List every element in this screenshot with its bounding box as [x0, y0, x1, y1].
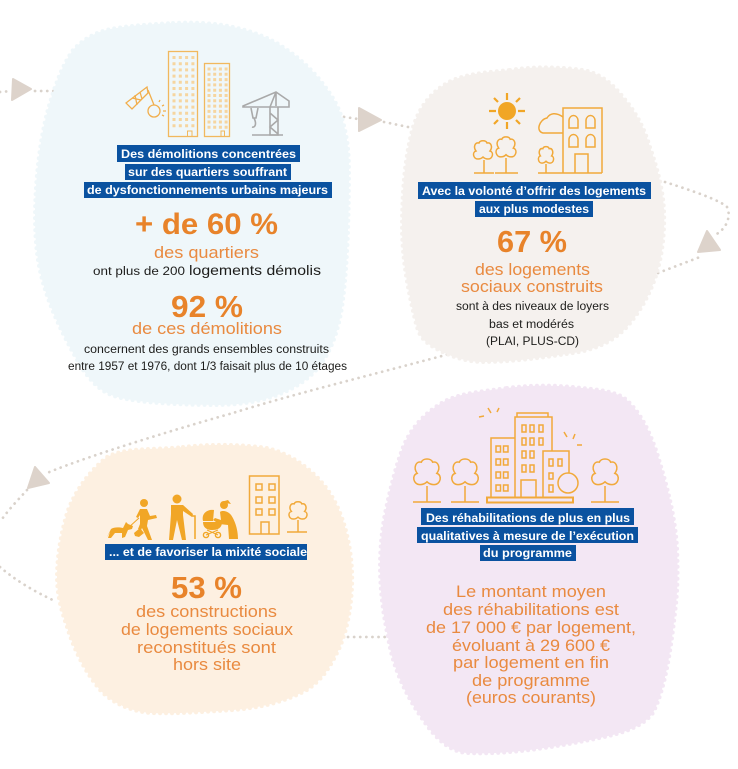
stat: 53 percent: reconstitués sont: [137, 639, 276, 657]
arrow: to social mix: [28, 467, 49, 488]
text: average amount: Le montant moyen: [456, 583, 606, 601]
stat: more than 60 percent: logements démolis: [189, 262, 321, 278]
stat: 53 percent: hors site: [173, 656, 241, 674]
panel: demolitions background: [35, 23, 349, 405]
text: average amount: (euros courants): [466, 689, 596, 707]
icon: sun: [489, 93, 525, 129]
heading: demolitions: de dysfonctionnements urbains majeurs: [87, 185, 328, 197]
heading: rehabilitation: du programme: [483, 548, 572, 560]
stat: 67 percent: sont à des niveaux de loyers: [456, 301, 609, 313]
panel: new housing background: [402, 67, 664, 362]
heading: rehabilitation: Des réhabilitations de plus en plus: [426, 513, 630, 525]
stat: 67 percent: sociaux construits: [461, 277, 603, 296]
icon: elder with cane: [169, 494, 195, 540]
icon: second tower: [204, 64, 230, 136]
heading: new housing: [418, 182, 651, 217]
stat: 92 percent: de ces démolitions: [132, 319, 282, 338]
icon: rehabilitation trees: [413, 459, 619, 502]
text: average amount: de 17 000 € par logement,: [426, 619, 636, 637]
stat: more than 60 percent: [93, 208, 321, 278]
panel: social mix background: [57, 445, 352, 713]
icon: dog walker: [107, 499, 157, 540]
heading: social mix: [105, 544, 307, 560]
stat: more than 60 percent: ont plus de 200: [93, 266, 185, 278]
icon: rehabilitated buildings: [479, 408, 582, 502]
heading: new housing: Avec la volonté d’offrir des logements: [422, 186, 646, 198]
icon: parent with pram: [203, 500, 238, 539]
text: average amount: évoluant à 29 600 €: [452, 637, 610, 655]
dotted journey line: [0, 91, 729, 637]
panel: rehabilitation background: [380, 386, 678, 753]
stat: 67 percent: [456, 224, 609, 348]
heading: rehabilitation: qualitatives à mesure de l’exécution: [421, 531, 634, 543]
stat: 67 percent: (PLAI, PLUS-CD): [486, 336, 579, 348]
stat: more than 60 percent: des quartiers: [154, 243, 259, 262]
stat: 67 percent: des logements: [475, 260, 590, 279]
stat: 92 percent: 92 %: [171, 289, 243, 324]
stat: 92 percent: entre 1957 et 1976, dont 1/3 faisait plus de 10 étages: [68, 361, 347, 373]
text: average amount: des réhabilitations est: [443, 601, 619, 619]
text: average amount: par logement en fin: [453, 654, 609, 672]
heading: demolitions: [84, 145, 332, 198]
heading: rehabilitation: [417, 508, 638, 561]
heading: demolitions: sur des quartiers souffrant: [128, 167, 287, 179]
icon: building: [250, 476, 279, 534]
arrow: to housing: [359, 108, 381, 131]
arrow: entry: [12, 79, 31, 100]
stat: 53 percent: [121, 570, 294, 674]
heading: demolitions: Des démolitions concentrées: [121, 149, 296, 161]
heading: new housing: aux plus modestes: [479, 204, 589, 216]
icon: people group: [107, 476, 307, 540]
heading: social mix: ... et de favoriser la mixité sociale: [109, 547, 307, 559]
stat: 53 percent: des constructions: [136, 603, 277, 621]
stat: 67 percent: bas et modérés: [489, 319, 574, 331]
stat: more than 60 percent: + de 60 %: [135, 208, 278, 241]
text: average amount: de programme: [472, 672, 590, 690]
text: average amount: [426, 583, 636, 707]
stat: 53 percent: 53 %: [171, 570, 242, 605]
stat: 92 percent: concernent des grands ensembles construits: [84, 344, 329, 356]
arrow: to next row: [698, 231, 720, 252]
icon: tall tower: [168, 52, 198, 136]
icon: wrecking crane: [126, 87, 166, 117]
icon: trees and building: [474, 108, 602, 173]
stat: 53 percent: de logements sociaux: [121, 621, 294, 639]
icon: tower crane: [243, 92, 289, 135]
stat: 67 percent: 67 %: [497, 224, 567, 259]
icon: tree: [287, 502, 307, 532]
stat: 92 percent: [68, 289, 347, 373]
